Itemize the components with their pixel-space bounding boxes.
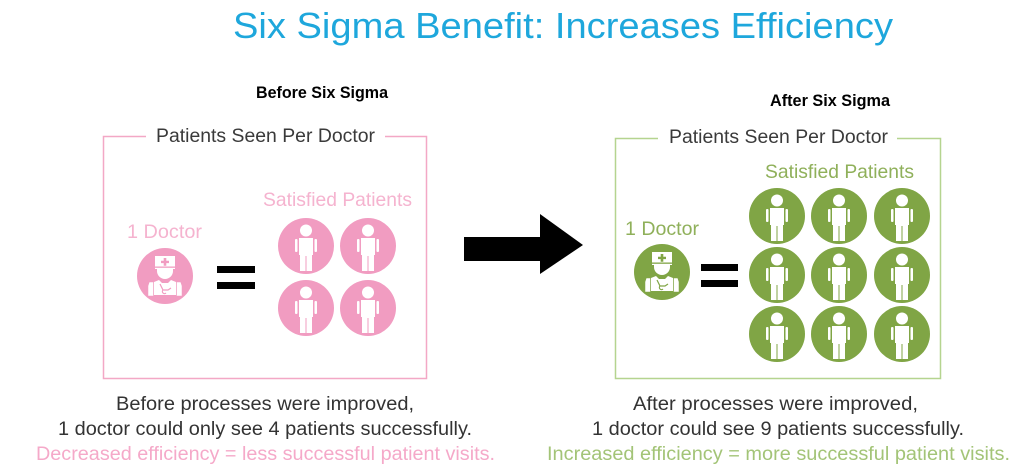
icon: patient <box>874 188 930 244</box>
title: Six Sigma Benefit: Increases Efficiency <box>233 5 893 46</box>
text block: before caption: Before processes were improved, <box>116 394 414 415</box>
heading: after six sigma: After Six Sigma <box>770 91 891 110</box>
icon: equals sign <box>217 266 255 289</box>
label: satisfied patients: Satisfied Patients <box>765 161 914 183</box>
icon: patient <box>749 306 805 362</box>
panel frame: before <box>104 136 426 378</box>
label: satisfied patients: Satisfied Patients <box>263 189 412 211</box>
panel title: patients seen per doctor: Patients Seen Per Doctor <box>669 127 889 148</box>
icon: doctor <box>137 248 193 304</box>
icon: patient <box>874 247 930 303</box>
text block: before caption: 1 doctor could only see 4 patients successfully. <box>58 419 472 440</box>
icon: patient <box>811 306 867 362</box>
panel: after <box>616 127 940 378</box>
icon: patient <box>811 247 867 303</box>
icon: doctor <box>634 244 690 300</box>
icon: patient <box>278 280 334 336</box>
icon: patient <box>749 188 805 244</box>
icon: patient <box>749 247 805 303</box>
arrow <box>464 214 583 274</box>
panel frame: after <box>616 138 940 378</box>
label: 1 doctor: 1 Doctor <box>127 221 203 243</box>
text block: after caption: After processes were improved, <box>633 394 918 415</box>
text block: after caption: 1 doctor could see 9 patients successfully. <box>592 419 964 440</box>
text block: after caption <box>547 394 1010 465</box>
text block: before caption <box>36 394 495 465</box>
panel: before <box>104 126 426 378</box>
icon: patient <box>811 188 867 244</box>
heading: before six sigma: Before Six Sigma <box>256 83 389 102</box>
icon: patient <box>340 218 396 274</box>
panel title: patients seen per doctor: Patients Seen Per Doctor <box>156 126 376 147</box>
label: 1 doctor: 1 Doctor <box>625 218 700 240</box>
text block: after caption: Increased efficiency = more successful patient visits. <box>547 444 1010 465</box>
icon: patient <box>340 280 396 336</box>
icon: equals sign <box>701 264 738 287</box>
icon: patient <box>874 306 930 362</box>
icon: patient <box>278 218 334 274</box>
text block: before caption: Decreased efficiency = less successful patient visits. <box>36 444 495 465</box>
